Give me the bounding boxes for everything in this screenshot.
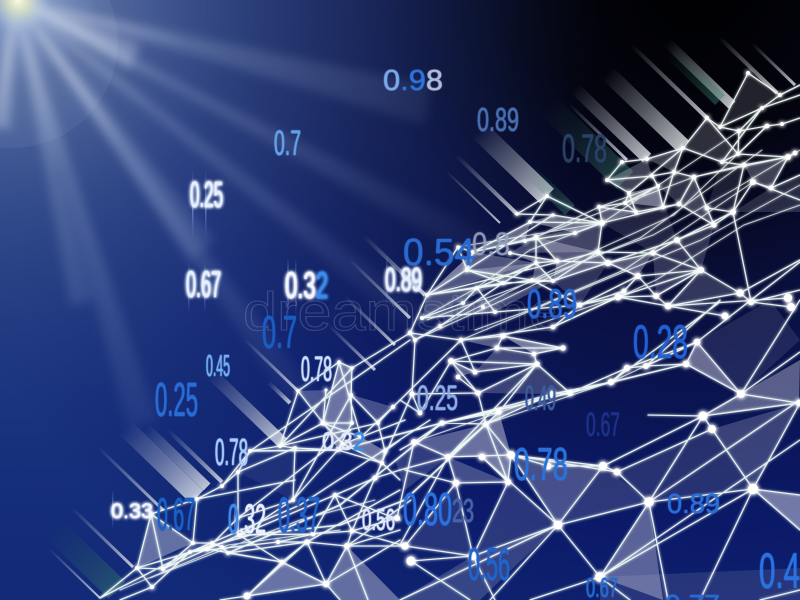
number 0.32 bright: 0.32 [285, 265, 328, 306]
floating numbers [111, 65, 800, 600]
light rays from top-left corner [0, 0, 580, 428]
number 0.98: 0.98 [383, 65, 443, 97]
floating numbers: 0.45 [206, 348, 230, 383]
floating numbers: 0.49 [525, 379, 556, 418]
number 0.7: 0.7 [274, 124, 301, 163]
mesh: glowing network nodes [135, 71, 800, 600]
floating numbers: 0.56 [468, 538, 510, 590]
mesh: network edges [100, 73, 800, 600]
number 0.89 lower right: 0.89 [667, 488, 720, 519]
light glow: top-left corner [0, 0, 620, 600]
light source core [0, 0, 52, 34]
floating numbers: 0.25 [190, 174, 223, 215]
number 0.32 small over mesh: 0.32 [322, 428, 365, 456]
lens flare disc [0, 0, 118, 148]
mesh: translucent triangle facets [137, 73, 800, 600]
number flares: vertical light bars [112, 170, 388, 545]
floating numbers: 0.78 [215, 432, 248, 474]
number 0.8 dim: 0.8 [472, 226, 510, 262]
floating numbers: 0.37 [278, 487, 320, 543]
number 0.28: 0.28 [633, 315, 688, 368]
number 0.54 blue: 0.54 [403, 232, 475, 274]
number 23 faint: 23 [452, 492, 474, 529]
floating numbers: 0.25 [155, 374, 198, 427]
number 0.7 blue: 0.7 [262, 306, 297, 358]
floating numbers: 0.67 [186, 264, 221, 305]
number 0.25 mesh: 0.25 [417, 379, 458, 418]
number 0.78 faint: 0.78 [562, 127, 607, 171]
floating numbers: 0.78 [301, 350, 332, 389]
watermark text: dreamstime [243, 282, 563, 342]
number 0.89 blue: 0.89 [527, 280, 577, 327]
number 0.78 mesh blue: 0.78 [514, 438, 568, 490]
number 0.67 faint: 0.67 [586, 406, 620, 444]
number 0.89 white: 0.89 [385, 261, 422, 298]
number 0.80: 0.80 [403, 483, 452, 535]
floating numbers: 0.67 [157, 488, 195, 540]
number 0.32 lower: 0.32 [228, 495, 266, 542]
number 0.89 dim: 0.89 [477, 101, 519, 138]
number 0.33: 0.33 [111, 500, 153, 523]
number 0.56 small: 0.56 [362, 502, 395, 537]
